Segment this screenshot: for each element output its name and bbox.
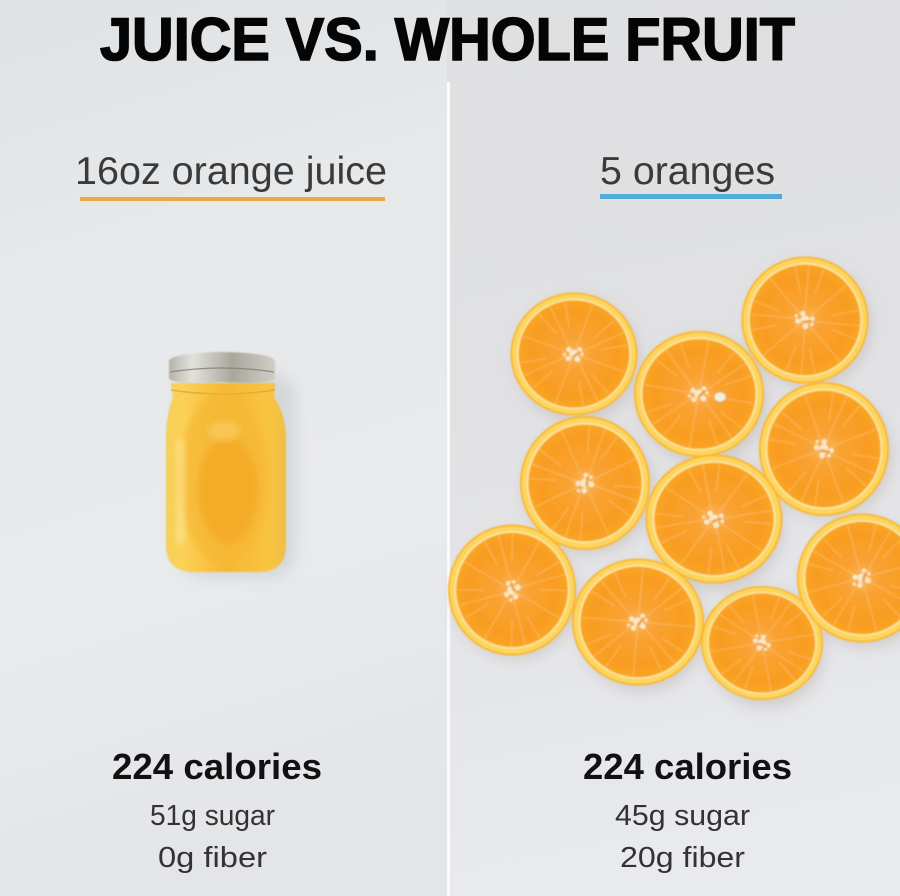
orange shadows xyxy=(453,264,900,708)
orange slice 6 xyxy=(619,429,809,609)
right calories: 224 calories xyxy=(583,746,792,787)
jar shadow xyxy=(178,372,296,578)
right nutrition facts xyxy=(583,746,792,874)
orange slices xyxy=(425,231,900,709)
left panel background xyxy=(0,0,447,896)
jar metal lid xyxy=(169,352,275,383)
seed on slice 3 xyxy=(714,392,726,402)
heading text: 16oz orange juice: 16oz orange juice xyxy=(75,150,387,193)
orange slice 3 xyxy=(624,321,774,467)
orange underline xyxy=(80,197,385,201)
oranges group xyxy=(425,231,900,709)
jar highlights xyxy=(176,440,185,544)
left nutrition facts xyxy=(112,746,322,874)
left sugar: 51g sugar xyxy=(150,800,275,832)
right column heading xyxy=(600,150,782,199)
blue underline xyxy=(600,194,782,199)
left column heading xyxy=(75,150,387,201)
orange slice 5 xyxy=(499,394,671,572)
jar of orange juice xyxy=(166,352,296,578)
jar embossed logo xyxy=(208,421,240,441)
right sugar: 45g sugar xyxy=(615,800,750,832)
heading text: 5 oranges: 5 oranges xyxy=(600,150,775,193)
center divider xyxy=(447,82,450,896)
orange slice 8 xyxy=(566,553,710,691)
left calories: 224 calories xyxy=(112,746,322,787)
lid rim xyxy=(170,368,274,372)
orange slice 2 xyxy=(716,231,894,409)
title: JUICE VS. WHOLE FRUIT xyxy=(100,6,795,73)
orange slice 4 xyxy=(741,363,900,535)
orange slice 1 xyxy=(493,275,655,433)
jar neck ridge xyxy=(171,390,275,394)
jar body xyxy=(166,383,286,572)
right panel background xyxy=(447,0,900,896)
orange slice 9 xyxy=(691,577,833,709)
orange slice 10 xyxy=(782,499,900,657)
orange slice 7 xyxy=(425,501,599,679)
right fiber: 20g fiber xyxy=(620,842,745,874)
jar inner oval xyxy=(198,437,258,543)
left fiber: 0g fiber xyxy=(158,842,267,874)
jar embossed oval xyxy=(179,392,269,564)
